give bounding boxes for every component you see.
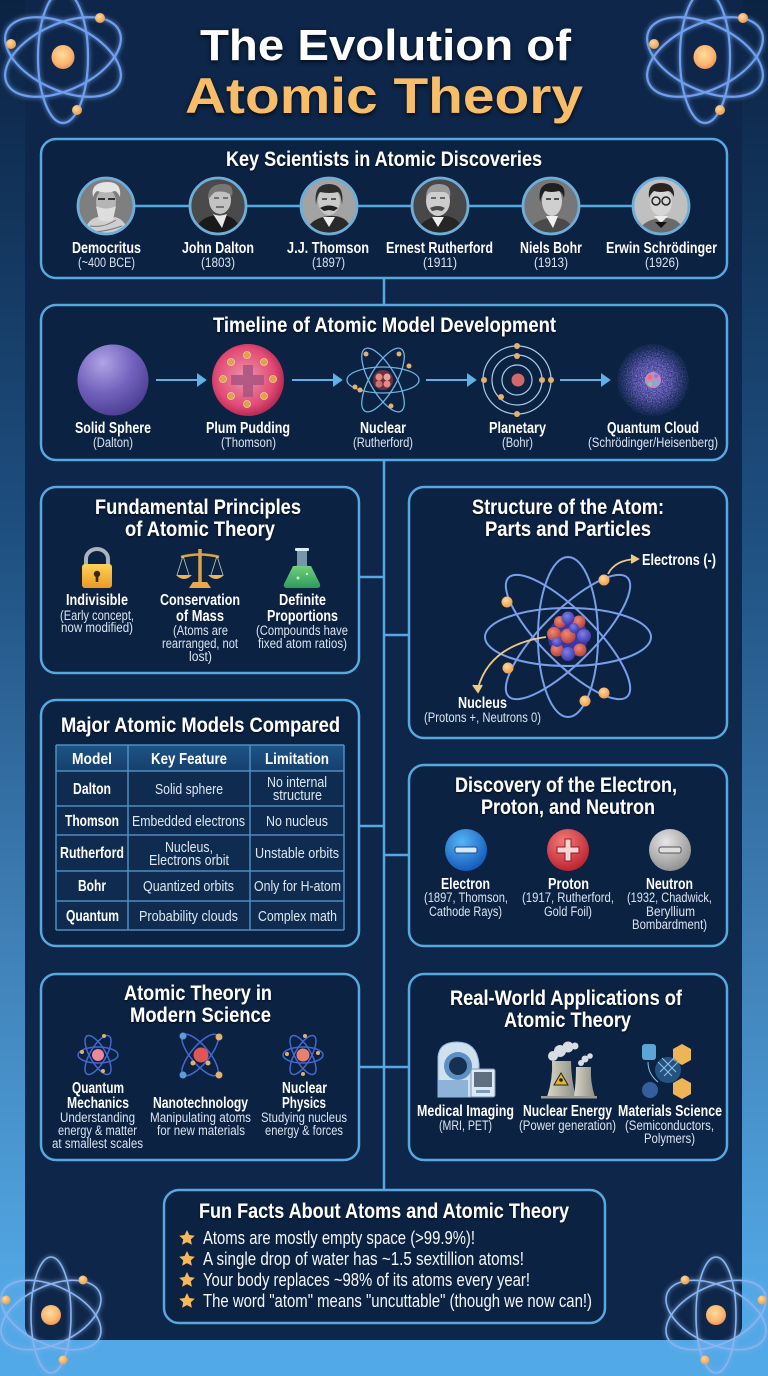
applications labels: Polymers) bbox=[644, 1131, 695, 1146]
particle labels: Proton bbox=[548, 876, 589, 893]
icon: atom top left bbox=[0, 0, 133, 123]
panel: real-world applications bbox=[409, 974, 727, 1160]
comparison table: Dalton bbox=[73, 781, 111, 798]
applications labels: Materials Science bbox=[618, 1103, 722, 1120]
comparison table: structure bbox=[273, 787, 322, 804]
heading: applications: Real-World Applications of bbox=[450, 986, 683, 1010]
icon: quantum atom bbox=[78, 1032, 118, 1078]
modern science labels: Quantum bbox=[72, 1080, 124, 1097]
model labels: Nuclear bbox=[360, 420, 406, 437]
modern science labels: Studying nucleus bbox=[261, 1110, 347, 1125]
principles text: Indivisible bbox=[66, 592, 128, 609]
comparison table: No nucleus bbox=[266, 813, 328, 830]
arrow: to electrons bbox=[608, 555, 638, 574]
icon: proton bbox=[547, 829, 589, 871]
comparison table: Rutherford bbox=[60, 845, 124, 862]
scientist names and dates: Democritus bbox=[72, 240, 141, 257]
comparison table: Bohr bbox=[78, 878, 106, 895]
principles text: now modified) bbox=[61, 620, 133, 635]
modern science labels: Mechanics bbox=[67, 1095, 129, 1112]
comparison table: Nucleus, bbox=[165, 839, 213, 856]
panel: discovery of particles bbox=[409, 765, 727, 946]
icon: scales bbox=[176, 549, 224, 588]
heading: timeline: Timeline of Atomic Model Development bbox=[213, 313, 556, 337]
comparison table: Model bbox=[72, 751, 112, 768]
title bbox=[185, 21, 583, 124]
scientist names and dates: Niels Bohr bbox=[520, 240, 582, 257]
principles text: rearranged, not bbox=[162, 636, 238, 651]
heading: discovery: Discovery of the Electron, bbox=[455, 773, 677, 797]
icon: nuclear physics bbox=[283, 1032, 323, 1078]
heading: applications bbox=[450, 986, 683, 1032]
particle labels: Bombardment) bbox=[632, 917, 707, 932]
comparison table: Electrons orbit bbox=[149, 852, 230, 869]
scientist names and dates: (~400 BCE) bbox=[78, 255, 135, 270]
comparison table: Embedded electrons bbox=[132, 813, 245, 830]
stars bbox=[179, 1230, 195, 1308]
heading: modern science bbox=[124, 981, 272, 1027]
icon: cooling towers bbox=[541, 1042, 597, 1098]
applications labels: Medical Imaging bbox=[417, 1103, 514, 1120]
scientist names and dates: (1926) bbox=[645, 255, 679, 270]
icon: electron bbox=[445, 829, 487, 871]
modern science labels: Nuclear bbox=[282, 1080, 327, 1097]
scientist names and dates: (1913) bbox=[534, 255, 568, 270]
comparison table: Limitation bbox=[265, 751, 329, 768]
icon: MRI scanner bbox=[438, 1042, 495, 1097]
modern science labels: energy & forces bbox=[265, 1123, 343, 1138]
connector lines bbox=[359, 278, 409, 1190]
model labels: (Thomson) bbox=[221, 435, 276, 450]
particle labels: (1917, Rutherford, bbox=[522, 890, 614, 905]
scientist names and dates: J.J. Thomson bbox=[287, 240, 369, 257]
modern science labels: at smallest scales bbox=[52, 1136, 143, 1151]
portrait rings bbox=[78, 178, 689, 234]
principles text: Conservation bbox=[160, 592, 240, 609]
title: The Evolution of bbox=[200, 21, 571, 70]
comparison table: Thomson bbox=[65, 813, 119, 830]
comparison table: Key Feature bbox=[151, 751, 227, 768]
arrows bbox=[156, 375, 609, 385]
particle labels bbox=[424, 876, 712, 932]
scientist names and dates: (1897) bbox=[312, 255, 345, 270]
heading: fun facts: Fun Facts About Atoms and Atomic Theory bbox=[199, 1199, 569, 1223]
model labels: (Rutherford) bbox=[353, 435, 413, 450]
scientist names and dates: (1803) bbox=[201, 255, 235, 270]
principles text: (Compounds have bbox=[256, 623, 348, 638]
particle labels: (1932, Chadwick, bbox=[627, 890, 712, 905]
heading: discovery bbox=[455, 773, 677, 819]
comparison table: Probability clouds bbox=[139, 908, 238, 925]
particle labels: (1897, Thomson, bbox=[424, 890, 508, 905]
fact list: Your body replaces ~98% of its atoms every year! bbox=[203, 1269, 530, 1290]
label: nucleus: Nucleus bbox=[458, 695, 507, 712]
model labels: (Bohr) bbox=[502, 435, 533, 450]
fact list: A single drop of water has ~1.5 sextillion atoms! bbox=[203, 1248, 524, 1269]
model: plum pudding bbox=[212, 344, 284, 416]
title: Atomic Theory bbox=[185, 68, 583, 124]
heading: modern science: Modern Science bbox=[130, 1003, 271, 1027]
principles text: of Mass bbox=[176, 608, 224, 625]
model labels: Solid Sphere bbox=[75, 420, 151, 437]
particle labels: Neutron bbox=[646, 876, 693, 893]
heading: structure bbox=[472, 495, 664, 541]
applications labels: (MRI, PET) bbox=[439, 1118, 492, 1133]
heading: fundamental principles bbox=[95, 495, 301, 541]
icon: atom top right bbox=[635, 0, 768, 123]
comparison table: Unstable orbits bbox=[255, 845, 339, 862]
modern science labels: Physics bbox=[282, 1095, 326, 1112]
heading: key scientists: Key Scientists in Atomic Discoveries bbox=[226, 147, 542, 171]
comparison table: Quantum bbox=[66, 908, 119, 925]
arrow: to nucleus bbox=[473, 637, 546, 692]
icon: atom bottom right bbox=[655, 1257, 768, 1373]
particle labels: Electron bbox=[441, 876, 490, 893]
modern science labels: Understanding bbox=[60, 1110, 135, 1125]
icon: neutron bbox=[649, 829, 691, 871]
principles text bbox=[60, 592, 348, 664]
panel: fundamental principles bbox=[41, 487, 359, 673]
heading: structure: Parts and Particles bbox=[485, 517, 651, 541]
model: quantum cloud bbox=[617, 344, 689, 416]
particle labels: Gold Foil) bbox=[544, 904, 592, 919]
panel: structure of the atom bbox=[409, 487, 727, 738]
heading: fundamental principles: Fundamental Principles bbox=[95, 495, 301, 519]
comparison table: Complex math bbox=[258, 908, 337, 925]
principles text: Definite bbox=[279, 592, 326, 609]
heading: structure: Structure of the Atom: bbox=[472, 495, 664, 519]
icon: materials science bbox=[642, 1044, 691, 1099]
principles text: fixed atom ratios) bbox=[258, 636, 347, 651]
modern science labels: Manipulating atoms bbox=[150, 1110, 251, 1125]
scientist names and dates: John Dalton bbox=[182, 240, 254, 257]
applications labels bbox=[417, 1103, 722, 1146]
model: nuclear bbox=[347, 342, 419, 418]
principles text: (Early concept, bbox=[60, 608, 134, 623]
scientist names and dates bbox=[72, 240, 717, 270]
panel: models compared bbox=[41, 700, 359, 946]
portrait: Ernest Rutherford bbox=[413, 179, 467, 232]
scientist names and dates: (1911) bbox=[423, 255, 457, 270]
model labels: (Schrödinger/Heisenberg) bbox=[588, 435, 718, 450]
portrait: Erwin Schrödinger bbox=[634, 179, 688, 233]
label: nucleus: (Protons +, Neutrons 0) bbox=[424, 710, 541, 725]
modern science labels: Nanotechnology bbox=[153, 1095, 248, 1112]
comparison table: Solid sphere bbox=[155, 781, 223, 798]
principles text: Proportions bbox=[267, 608, 338, 625]
model labels: Plum Pudding bbox=[206, 420, 290, 437]
icon: lock bbox=[82, 549, 112, 588]
portrait: J.J. Thomson bbox=[302, 179, 356, 232]
applications labels: (Semiconductors, bbox=[625, 1118, 714, 1133]
heading: models compared: Major Atomic Models Compared bbox=[61, 713, 340, 737]
heading: modern science: Atomic Theory in bbox=[124, 981, 272, 1005]
modern science labels: energy & matter bbox=[58, 1123, 137, 1138]
panel: modern science bbox=[41, 974, 359, 1160]
icon: nanotechnology bbox=[176, 1029, 224, 1081]
particle labels: Cathode Rays) bbox=[429, 904, 502, 919]
modern science labels: for new materials bbox=[157, 1123, 245, 1138]
atom diagram bbox=[485, 557, 651, 717]
model labels bbox=[75, 420, 718, 450]
comparison table: No internal bbox=[267, 774, 327, 791]
fact list: Atoms are mostly empty space (>99.9%)! bbox=[203, 1227, 475, 1248]
panel: key scientists bbox=[41, 139, 727, 278]
portrait: Democritus bbox=[79, 179, 133, 233]
label: electrons: Electrons (-) bbox=[642, 552, 716, 569]
comparison table: Quantized orbits bbox=[143, 878, 234, 895]
scientist names and dates: Ernest Rutherford bbox=[386, 240, 493, 257]
modern science labels bbox=[52, 1080, 347, 1151]
applications labels: (Power generation) bbox=[519, 1118, 616, 1133]
panel: fun facts bbox=[164, 1190, 605, 1323]
icon: atom bottom left bbox=[0, 1257, 112, 1373]
fact list: The word "atom" means "uncuttable" (though we now can!) bbox=[203, 1290, 592, 1311]
heading: applications: Atomic Theory bbox=[504, 1008, 631, 1032]
principles text: (Atoms are bbox=[173, 623, 228, 638]
heading: fundamental principles: of Atomic Theory bbox=[125, 517, 275, 541]
model labels: Quantum Cloud bbox=[607, 420, 699, 437]
comparison table bbox=[56, 745, 344, 930]
model labels: (Dalton) bbox=[93, 435, 133, 450]
icon: flask bbox=[284, 548, 320, 588]
applications labels: Nuclear Energy bbox=[523, 1103, 612, 1120]
portrait: John Dalton bbox=[191, 179, 245, 233]
heading: discovery: Proton, and Neutron bbox=[481, 795, 655, 819]
particle labels: Beryllium bbox=[646, 904, 695, 919]
principles text: lost) bbox=[189, 649, 212, 664]
model labels: Planetary bbox=[489, 420, 546, 437]
scientist names and dates: Erwin Schrödinger bbox=[606, 240, 717, 257]
comparison table: Only for H-atom bbox=[254, 878, 341, 895]
model: planetary bbox=[481, 343, 554, 417]
portrait: Niels Bohr bbox=[524, 179, 578, 233]
model: solid sphere bbox=[78, 344, 148, 416]
fact list bbox=[203, 1227, 592, 1311]
label: nucleus bbox=[424, 695, 541, 725]
panel: timeline bbox=[41, 305, 727, 460]
